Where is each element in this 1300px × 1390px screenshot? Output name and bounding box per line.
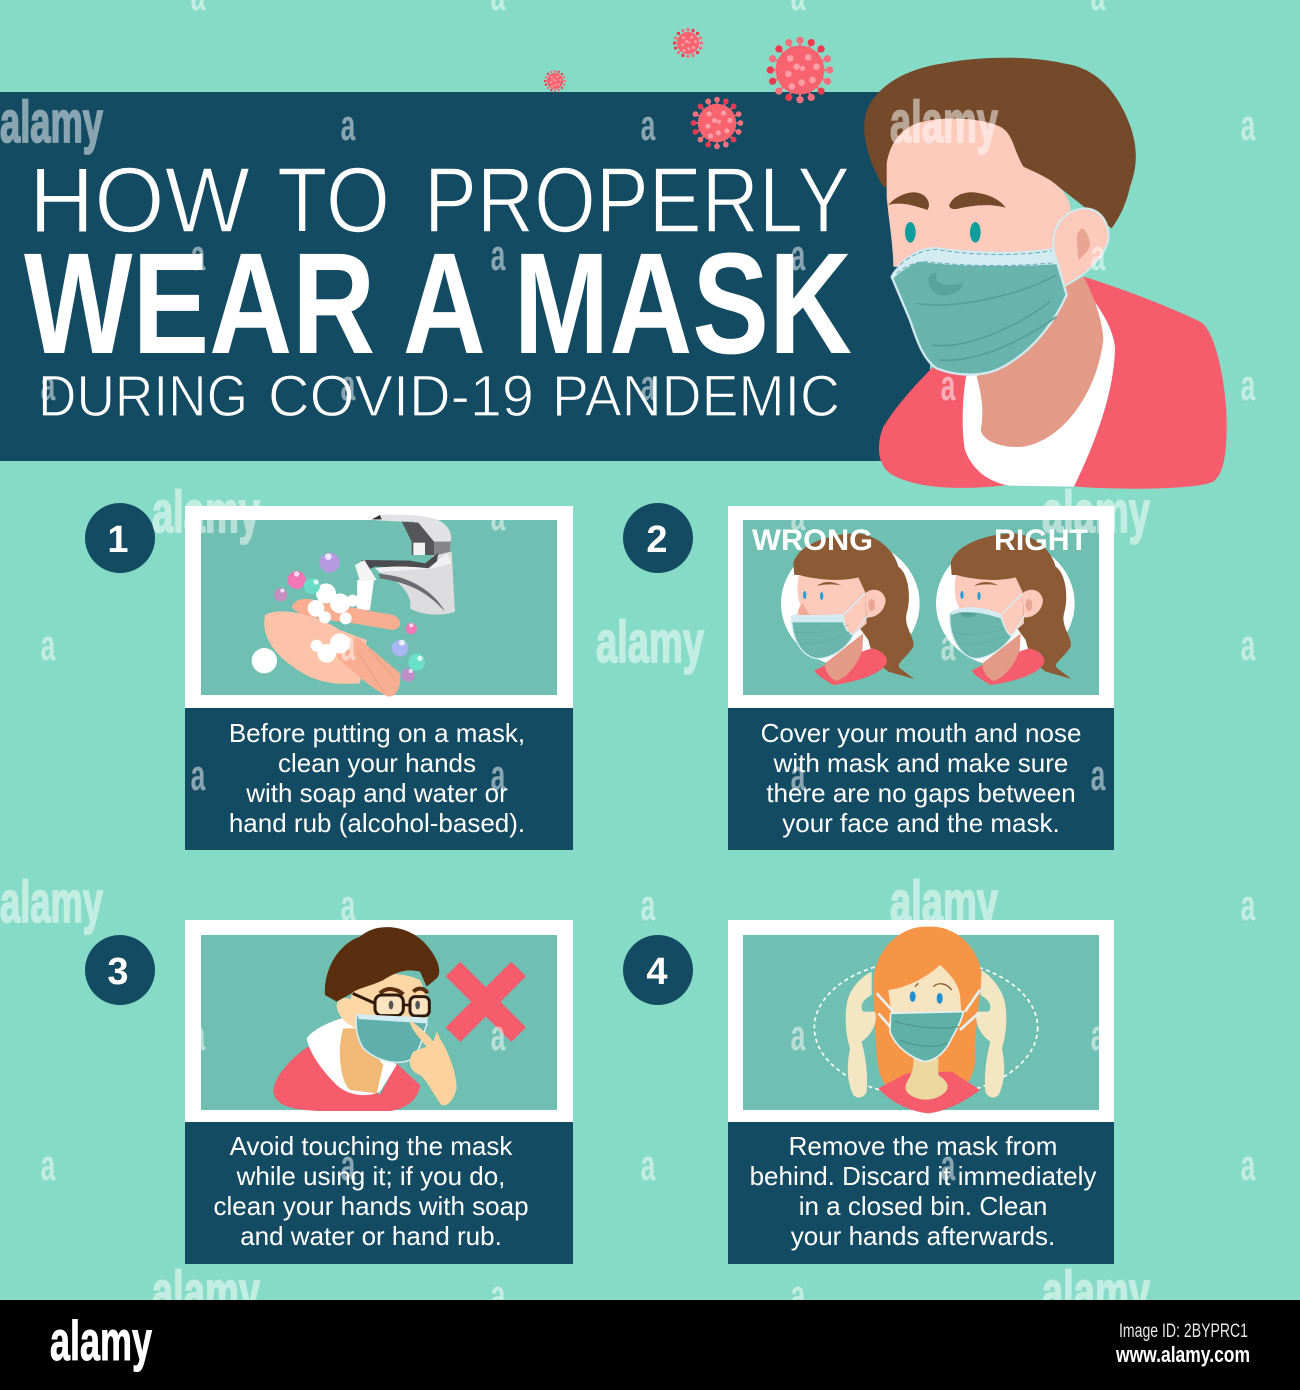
panel 2 caption: with mask and make sure — [773, 748, 1068, 778]
step 1 number badge: 1 — [107, 519, 129, 561]
watermarks: a — [791, 490, 806, 540]
watermarks: a — [941, 620, 956, 670]
panel 2 frame — [728, 506, 1114, 708]
panel 1 caption — [185, 708, 573, 850]
watermarks: a — [1241, 360, 1256, 410]
watermarks: a — [641, 1140, 656, 1190]
watermarks: a — [191, 1010, 206, 1060]
panel 1 frame — [185, 506, 573, 708]
panel 2 caption — [728, 708, 1114, 850]
panel 2 illustration: wrong mask position — [781, 533, 920, 685]
watermarks: a — [1241, 1140, 1256, 1190]
panel 2 caption: there are no gaps between — [766, 778, 1076, 808]
panel 1 caption: clean your hands — [278, 748, 476, 778]
title line 2: WEAR A MASK — [24, 223, 852, 384]
watermarks: a — [341, 880, 356, 930]
icon: red cross — [453, 969, 519, 1035]
label: right: RIGHT — [994, 524, 1088, 557]
panel 4 caption: in a closed bin. Clean — [799, 1191, 1047, 1221]
watermarks: alamy — [0, 90, 103, 155]
title line 1: HOW — [29, 148, 250, 252]
watermarks: a — [341, 100, 356, 150]
title line 1 — [29, 148, 850, 252]
watermarks: a — [341, 1140, 356, 1190]
watermarks: a — [1241, 880, 1256, 930]
watermarks: a — [341, 620, 356, 670]
panel 2 caption: Cover your mouth and nose — [761, 718, 1081, 748]
watermarks: a — [791, 1270, 806, 1320]
footer logo: alamy — [50, 1309, 152, 1372]
watermarks: a — [41, 1140, 56, 1190]
watermarks: a — [41, 620, 56, 670]
panel 3 caption — [185, 1122, 573, 1264]
title line 1: PROPERLY — [424, 148, 850, 252]
panel 2 illustration: right mask position — [936, 533, 1075, 685]
footer website: www.alamy.com — [1115, 1342, 1250, 1367]
watermarks: a — [791, 1010, 806, 1060]
watermarks: a — [641, 880, 656, 930]
panel 3 frame — [185, 920, 573, 1122]
watermarks: a — [191, 230, 206, 280]
panel 2 caption: your face and the mask. — [782, 808, 1060, 838]
title line 3: PANDEMIC — [552, 364, 840, 429]
title line 3: COVID-19 — [268, 364, 534, 429]
step 3 number badge: 3 — [107, 951, 129, 993]
illustration: man wearing mask — [864, 58, 1227, 489]
watermarks: a — [41, 360, 56, 410]
watermarks: a — [1091, 750, 1106, 800]
step 3 number badge — [85, 935, 155, 1005]
watermarks: a — [791, 230, 806, 280]
watermarks: a — [491, 490, 506, 540]
watermarks: alamy — [890, 90, 998, 155]
footer bar — [0, 1300, 1300, 1390]
header banner — [0, 92, 930, 461]
watermarks: a — [491, 1270, 506, 1320]
panel 4 caption: Remove the mask from — [789, 1131, 1057, 1161]
panel 4 caption — [728, 1122, 1114, 1264]
panel 1 caption: Before putting on a mask, — [229, 718, 525, 748]
watermarks: a — [491, 1010, 506, 1060]
step 4 number badge: 4 — [646, 951, 668, 993]
panel 1 caption: with soap and water or — [245, 778, 508, 808]
panel 1 illustration: washing hands — [252, 515, 455, 697]
title line 3: DURING — [38, 364, 248, 429]
watermarks: a — [641, 360, 656, 410]
step 4 number badge — [623, 935, 693, 1005]
watermarks: a — [1241, 620, 1256, 670]
title line 3 — [38, 364, 840, 429]
panel 3 illustration: do not touch the mask — [273, 927, 457, 1111]
step 2 number badge — [623, 503, 693, 573]
panel 3 caption: while using it; if you do, — [236, 1161, 505, 1191]
watermarks: a — [1091, 230, 1106, 280]
watermarks: a — [941, 360, 956, 410]
title line 1: TO — [277, 148, 390, 252]
watermarks: a — [791, 750, 806, 800]
label: wrong: WRONG — [752, 524, 873, 557]
watermarks: a — [1241, 100, 1256, 150]
watermarks: a — [341, 360, 356, 410]
panel 3 caption: clean your hands with soap — [213, 1191, 529, 1221]
watermarks: alamy — [596, 610, 704, 675]
icons: virus particles — [544, 28, 833, 149]
watermarks: a — [641, 100, 656, 150]
watermarks: alamy — [152, 480, 260, 545]
panel 1 caption: hand rub (alcohol-based). — [229, 808, 525, 838]
watermarks: a — [491, 750, 506, 800]
watermarks: alamy — [1042, 1260, 1150, 1325]
step 2 number badge: 2 — [646, 519, 668, 561]
panel 4 caption: your hands afterwards. — [791, 1221, 1055, 1251]
footer image id: Image ID: 2BYPRC1 — [1119, 1321, 1248, 1342]
watermarks: alamy — [1042, 480, 1150, 545]
watermarks: a — [491, 230, 506, 280]
watermarks: alamy — [0, 870, 103, 935]
watermarks: alamy — [152, 1260, 260, 1325]
panel 3 caption: and water or hand rub. — [240, 1221, 502, 1251]
watermarks: a — [191, 750, 206, 800]
panel 4 caption: behind. Discard it immediately — [750, 1161, 1096, 1191]
panel 4 illustration: removing the mask — [814, 927, 1038, 1113]
watermarks: a — [1091, 1010, 1106, 1060]
panel 4 frame — [728, 920, 1114, 1122]
watermarks: a — [941, 1140, 956, 1190]
watermarks: alamy — [890, 870, 998, 935]
panel 3 caption: Avoid touching the mask — [230, 1131, 513, 1161]
step 1 number badge — [85, 503, 155, 573]
